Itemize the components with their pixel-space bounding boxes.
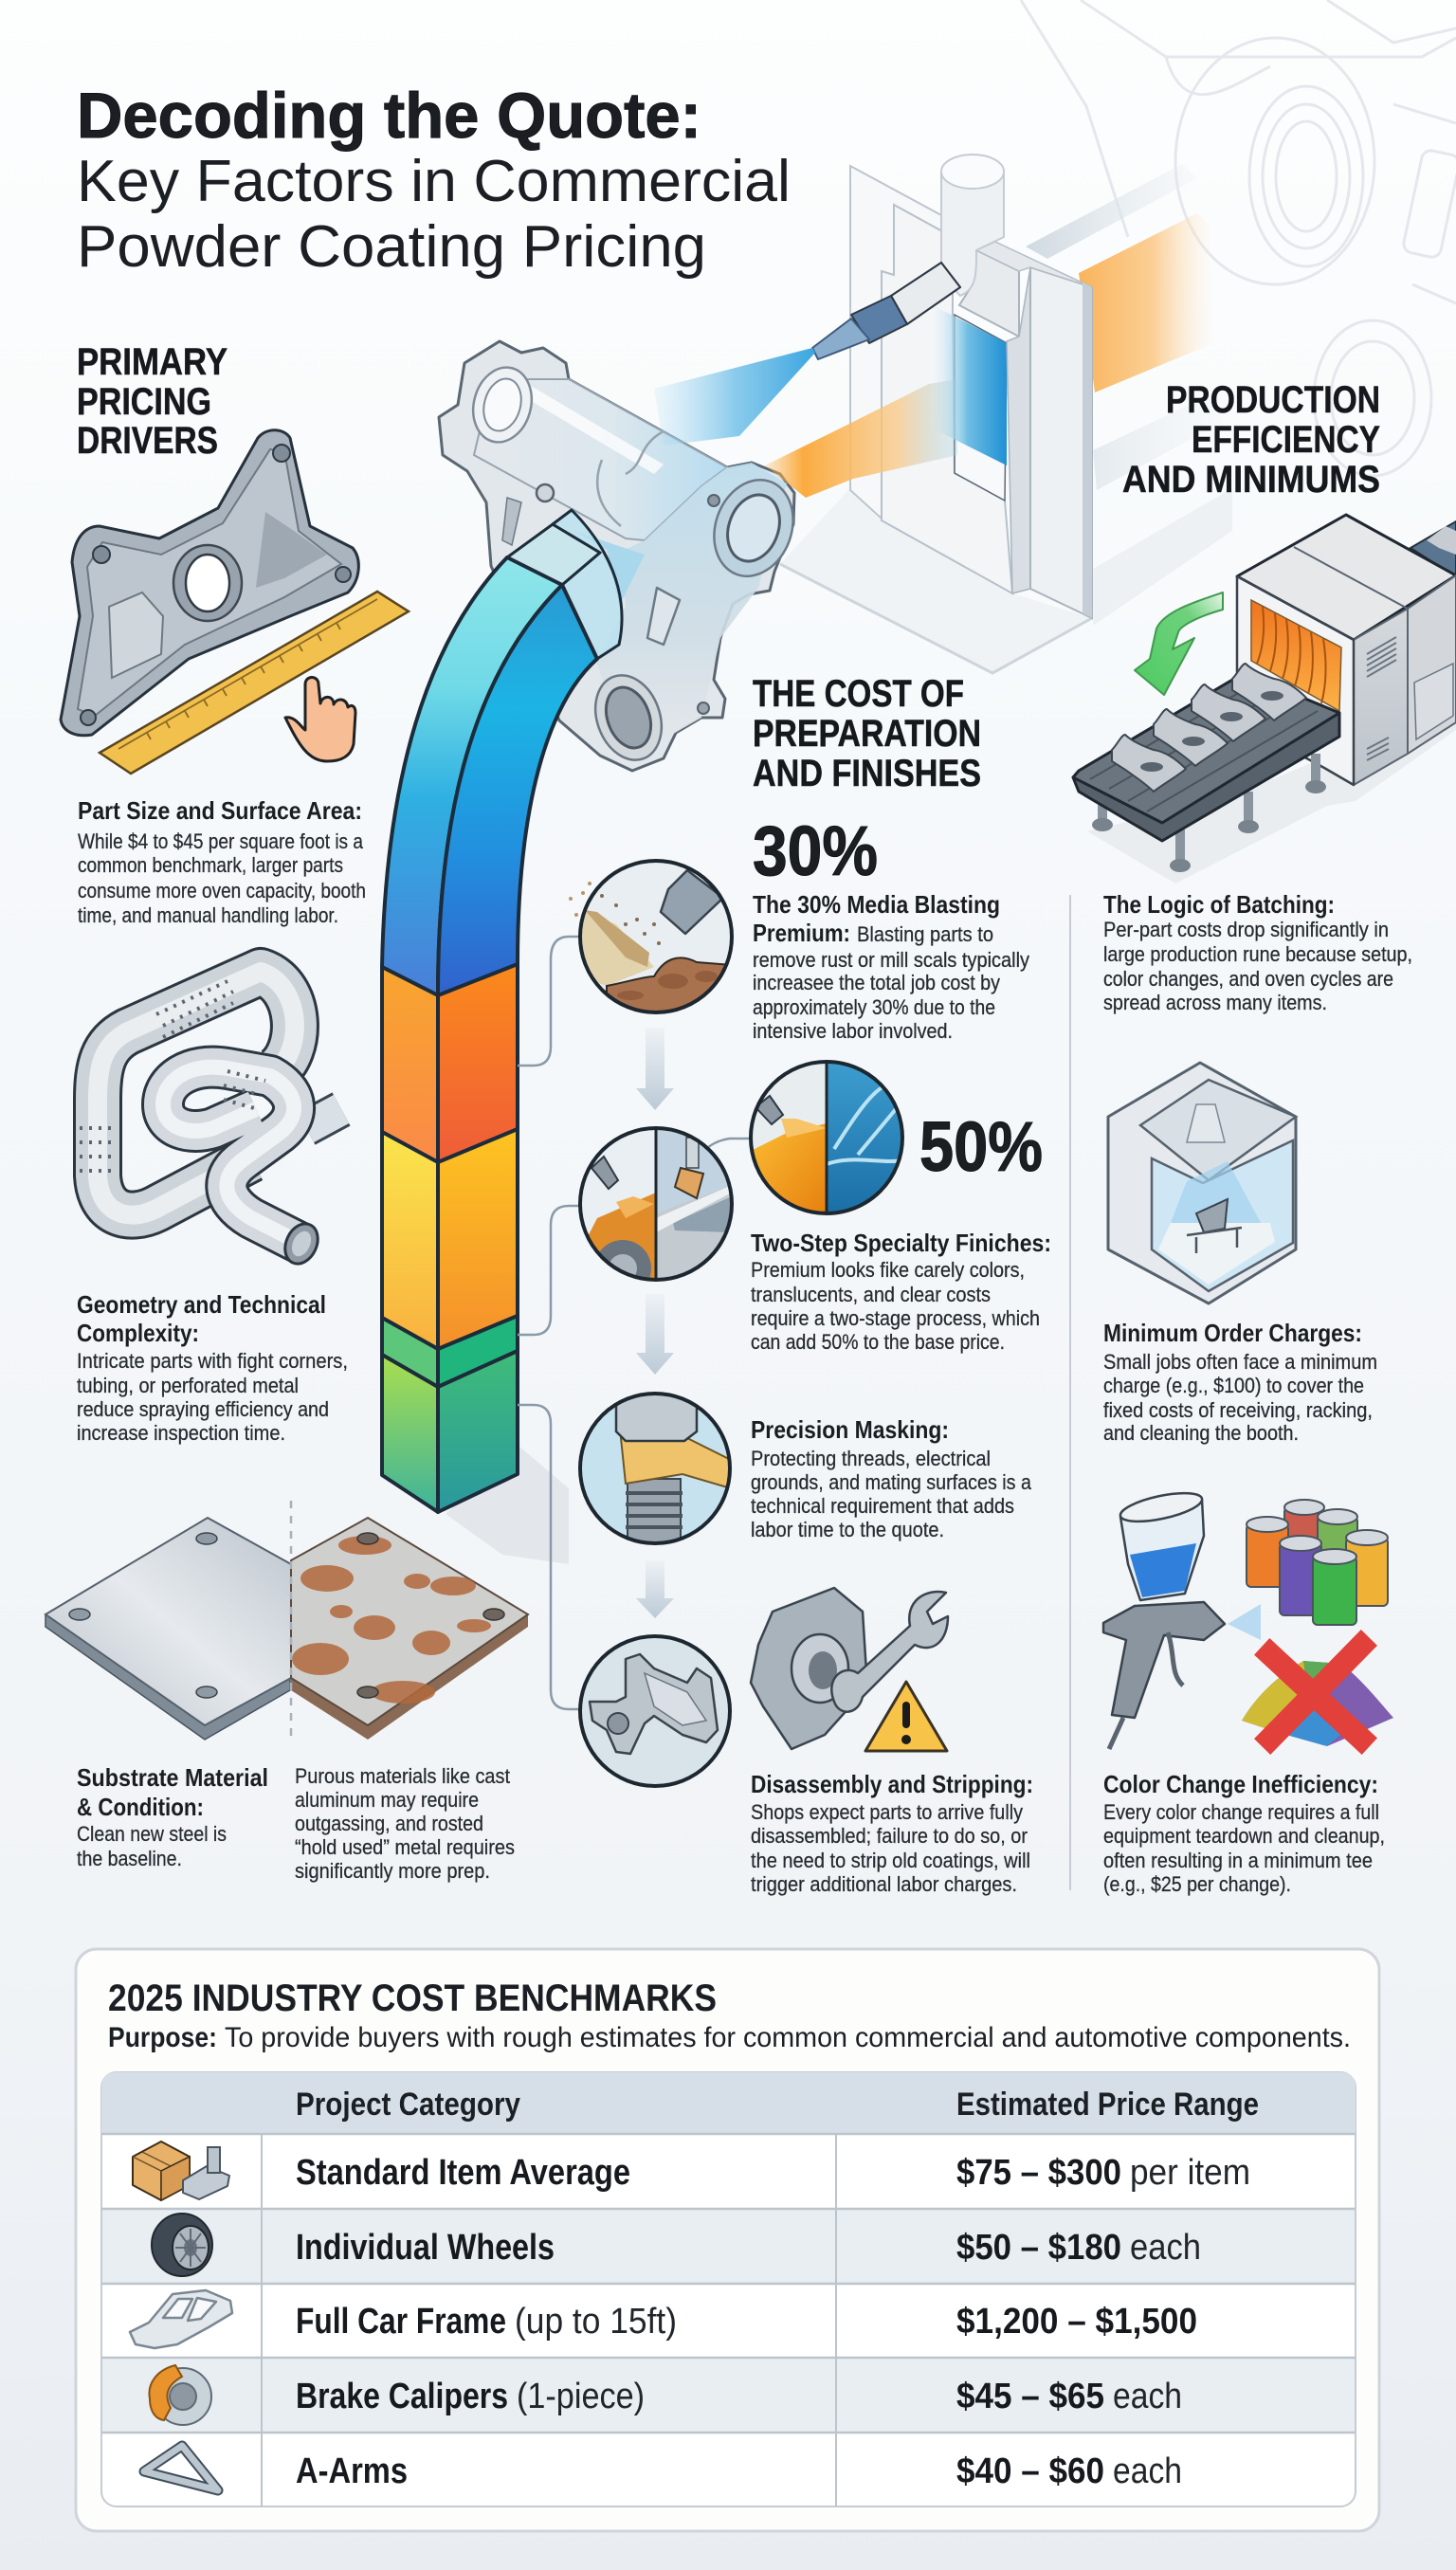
text: porous materials: Purous materials like cast — [295, 1764, 510, 1788]
table row: individual wheels: each — [1130, 2228, 1201, 2268]
section heading: cost of preparation and finishes: AND FINISHES — [753, 753, 981, 794]
icon: metal bracket with ruler and hand — [61, 430, 409, 774]
colored process column — [382, 510, 622, 1564]
text: porous materials — [295, 1764, 515, 1883]
text: media blasting premium: increasee the total job cost by — [753, 971, 1000, 994]
section heading: production efficiency and minimums: AND MINIMUMS — [1122, 459, 1380, 501]
text: disassembly and stripping: trigger additional labor charges. — [751, 1872, 1017, 1896]
text: media blasting premium — [753, 890, 1029, 1043]
icon circle: bracket part — [580, 1636, 730, 1786]
text: part size and surface area: common benchmark, larger parts — [78, 853, 343, 877]
title: Decoding the Quote: — [77, 80, 701, 152]
title: Key Factors in Commercial — [77, 149, 791, 214]
table row: standard item average: $75 – $300 — [956, 2153, 1121, 2193]
text: disassembly and stripping: Disassembly and Stripping: — [751, 1770, 1033, 1798]
text: minimum order charges: and cleaning the booth. — [1103, 1421, 1299, 1445]
text: geometry and technical complexity: reduce spraying efficiency and — [77, 1397, 329, 1421]
table header: Estimated Price Range — [956, 2087, 1259, 2123]
text: minimum order charges — [1103, 1319, 1377, 1445]
text: color change inefficiency — [1103, 1770, 1385, 1896]
text: minimum order charges: charge (e.g., $100) to cover the — [1103, 1374, 1364, 1397]
icon circle: masking tape on bolt — [580, 1391, 731, 1545]
text: geometry and technical complexity: Intricate parts with fight corners, — [77, 1349, 348, 1373]
section heading: cost of preparation and finishes: PREPARATION — [753, 713, 981, 755]
icon: wrench, casting and warning triangle — [751, 1588, 948, 1751]
text: part size and surface area: While $4 to $45 per square foot is a — [78, 829, 364, 853]
text: part size and surface area: time, and manual handling labor. — [78, 903, 338, 927]
icon circle: finish samples — [751, 1062, 902, 1215]
text: logic of batching: Per-part costs drop significantly in — [1103, 918, 1389, 941]
icon circle: media blasting — [569, 861, 732, 1014]
flow arrows — [636, 1028, 674, 1618]
table header: Project Category — [296, 2087, 520, 2123]
section heading: production efficiency and minimums — [1122, 379, 1380, 501]
text: substrate material and condition: the baseline. — [77, 1847, 182, 1870]
text: geometry and technical complexity: Complexity: — [77, 1319, 199, 1347]
section heading: primary pricing drivers: PRIMARY — [77, 341, 228, 383]
background line art: ghost casting — [1021, 0, 1456, 476]
benchmark purpose: Purpose: — [108, 2022, 217, 2053]
table row: brake calipers: each — [1113, 2377, 1182, 2416]
icon: powder booth cube — [1108, 1063, 1296, 1303]
text: porous materials: “hold used” metal requires — [295, 1835, 515, 1859]
text: disassembly and stripping: disassembled; failure to do so, or — [751, 1824, 1028, 1848]
section heading: cost of preparation and finishes — [753, 673, 981, 794]
text: media blasting premium: intensive labor involved. — [753, 1019, 953, 1043]
text: part size and surface area: Part Size and Surface Area: — [78, 796, 362, 825]
text: part size and surface area — [78, 796, 366, 927]
text: porous materials: significantly more prep. — [295, 1859, 490, 1883]
table row: brake calipers: Brake Calipers — [296, 2377, 508, 2416]
table row: brake calipers: $45 – $65 — [956, 2377, 1104, 2416]
spray nozzle — [812, 155, 1004, 359]
table row: a-arms — [144, 2446, 1182, 2491]
column divider — [1069, 895, 1071, 1890]
table header — [296, 2087, 1259, 2123]
table row: brake calipers — [149, 2365, 1182, 2425]
text: two-step specialty finishes: Premium looks fike carely colors, — [751, 1258, 1025, 1282]
stat: 50%: 50% — [919, 1107, 1043, 1186]
text: logic of batching: large production rune because setup, — [1103, 942, 1412, 966]
connector lines — [518, 937, 753, 1709]
table row: a-arms: A-Arms — [296, 2452, 408, 2491]
text: media blasting premium: Premium: — [753, 919, 850, 947]
text: part size and surface area: consume more oven capacity, booth — [78, 879, 366, 902]
text: logic of batching — [1103, 890, 1412, 1014]
text: minimum order charges: fixed costs of receiving, racking, — [1103, 1398, 1373, 1422]
section heading: primary pricing drivers — [77, 341, 228, 462]
text: precision masking: grounds, and mating surfaces is a — [751, 1470, 1032, 1494]
text: media blasting premium: The 30% Media Blasting — [753, 890, 1000, 919]
table row: individual wheels: $50 – $180 — [956, 2228, 1121, 2268]
section heading: cost of preparation and finishes: THE COST OF — [753, 673, 964, 715]
text: two-step specialty finishes: can add 50% to the base price. — [751, 1330, 1005, 1354]
text: substrate material and condition: & Condition: — [77, 1793, 204, 1821]
table row: full car frame — [130, 2290, 1197, 2348]
text: porous materials: outgassing, and rosted — [295, 1812, 483, 1835]
title — [77, 80, 791, 280]
yellow segment — [382, 1129, 518, 1349]
illustration: clean and rusted steel plates — [46, 1501, 528, 1741]
blue segment — [382, 557, 597, 995]
text: two-step specialty finishes — [751, 1229, 1051, 1354]
icon: conveyor oven — [1073, 515, 1456, 884]
text: precision masking — [751, 1415, 1032, 1541]
text: substrate material and condition: Clean new steel is — [77, 1822, 227, 1846]
section heading: primary pricing drivers: PRICING — [77, 381, 211, 423]
text: disassembly and stripping — [751, 1770, 1033, 1896]
table row: individual wheels — [152, 2214, 1201, 2276]
text: precision masking: technical requirement that adds — [751, 1494, 1014, 1518]
text: media blasting premium: Blasting parts to — [857, 922, 993, 946]
icon: spray gun — [1103, 1487, 1261, 1749]
table row: full car frame: $1,200 – $1,500 — [956, 2302, 1197, 2342]
text: color change inefficiency: equipment teardown and cleanup, — [1103, 1824, 1385, 1848]
benchmark title: 2025 INDUSTRY COST BENCHMARKS — [108, 1978, 717, 2019]
text: geometry and technical complexity: tubing, or perforated metal — [77, 1374, 299, 1397]
text: media blasting premium: approximately 30% due to the — [753, 995, 995, 1019]
icon: powder pile with red X — [1242, 1646, 1393, 1746]
text: substrate material and condition — [77, 1763, 268, 1870]
text: color change inefficiency: Every color change requires a full — [1103, 1800, 1379, 1824]
benchmark table — [101, 2072, 1356, 2506]
text: two-step specialty finishes: translucents, and clear costs — [751, 1283, 991, 1306]
benchmark purpose: To provide buyers with rough estimates for common commercial and automotive components. — [225, 2022, 1351, 2053]
table row: brake calipers: (1-piece) — [517, 2377, 645, 2416]
illustration: spray booth — [780, 155, 1232, 673]
text: minimum order charges: Minimum Order Charges: — [1103, 1319, 1362, 1347]
table row: standard item average: Standard Item Average — [296, 2153, 630, 2193]
powder spray clouds — [654, 348, 957, 498]
green segment — [382, 1316, 518, 1512]
text: disassembly and stripping: Shops expect parts to arrive fully — [751, 1800, 1023, 1824]
text: color change inefficiency: often resulting in a minimum tee — [1103, 1849, 1373, 1872]
text: substrate material and condition: Substrate Material — [77, 1763, 268, 1792]
panel: cost benchmarks — [76, 1949, 1379, 2531]
section heading: primary pricing drivers: DRIVERS — [77, 420, 218, 462]
text: geometry and technical complexity: increase inspection time. — [77, 1421, 285, 1445]
stat: 30%: 30% — [753, 811, 878, 890]
icon: powder cans — [1247, 1500, 1388, 1625]
text: logic of batching: The Logic of Batching: — [1103, 890, 1335, 919]
text: two-step specialty finishes: Two-Step Specialty Finiches: — [751, 1229, 1051, 1257]
text: media blasting premium: remove rust or mill scals typically — [753, 948, 1029, 972]
text: color change inefficiency: (e.g., $25 per change). — [1103, 1872, 1291, 1896]
section heading: production efficiency and minimums: PRODUCTION — [1166, 379, 1380, 421]
table row: standard item average — [133, 2142, 1250, 2200]
text: porous materials: aluminum may require — [295, 1788, 479, 1812]
text: precision masking: labor time to the quote. — [751, 1518, 944, 1541]
section heading: production efficiency and minimums: EFFICIENCY — [1192, 419, 1380, 461]
text: minimum order charges: Small jobs often face a minimum — [1103, 1350, 1377, 1374]
text: color change inefficiency: Color Change Inefficiency: — [1103, 1770, 1378, 1798]
text: logic of batching: spread across many items. — [1103, 991, 1327, 1014]
text: logic of batching: color changes, and oven cycles are — [1103, 967, 1393, 991]
conveyor legs — [1092, 754, 1326, 872]
table row: a-arms: each — [1113, 2452, 1182, 2491]
orange segment — [382, 964, 518, 1162]
text: precision masking: Precision Masking: — [751, 1415, 949, 1444]
glass casting part — [439, 341, 806, 771]
icon: green recirculation arrow — [1135, 592, 1223, 695]
table row: individual wheels: Individual Wheels — [296, 2228, 555, 2268]
text: precision masking: Protecting threads, electrical — [751, 1447, 991, 1470]
table row: standard item average: per item — [1130, 2153, 1250, 2193]
table row: a-arms: $40 – $60 — [956, 2452, 1104, 2491]
icon circle: two-step car finish — [580, 1128, 732, 1297]
text: geometry and technical complexity — [77, 1290, 348, 1445]
text: geometry and technical complexity: Geometry and Technical — [77, 1290, 326, 1319]
text: two-step specialty finishes: require a two-stage process, which — [751, 1306, 1040, 1330]
icon: bent tubing — [80, 972, 341, 1269]
text: disassembly and stripping: the need to strip old coatings, will — [751, 1849, 1030, 1872]
table row: full car frame: (up to 15ft) — [515, 2302, 677, 2342]
title: Powder Coating Pricing — [77, 214, 706, 280]
table row: full car frame: Full Car Frame — [296, 2302, 506, 2342]
